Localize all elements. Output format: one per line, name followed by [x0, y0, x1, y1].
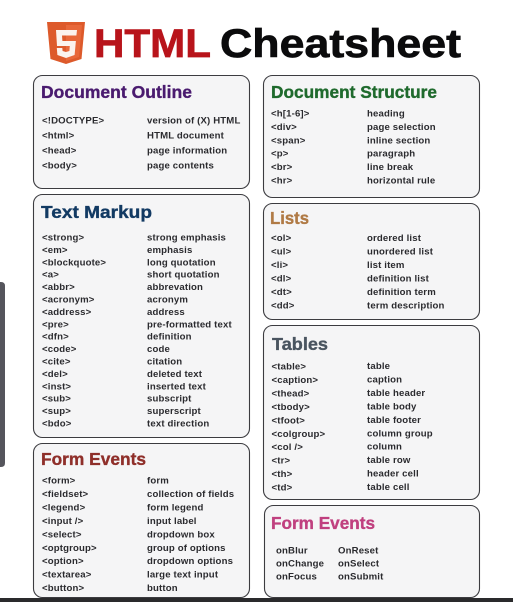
- descriptions: table cell: [367, 482, 410, 493]
- descriptions: strong emphasis: [147, 232, 226, 244]
- descriptions: header cell: [367, 469, 419, 480]
- descriptions: citation: [147, 356, 182, 368]
- descriptions: page information: [147, 146, 227, 156]
- tags: <html>: [42, 130, 75, 142]
- tags: <div>: [271, 122, 297, 133]
- tags: <cite>: [42, 356, 71, 368]
- descriptions: column group: [367, 428, 433, 439]
- panel: document structure: [264, 76, 480, 198]
- tags: <bdo>: [42, 418, 72, 430]
- tags: <sup>: [42, 406, 71, 417]
- descriptions: table: [367, 361, 390, 372]
- descriptions: definition list: [367, 274, 430, 284]
- tags: <head>: [42, 146, 77, 156]
- heading: form events: Form Events: [271, 513, 375, 533]
- tags: <hr>: [271, 176, 293, 186]
- tags: <thead>: [272, 388, 310, 399]
- descriptions: dropdown options: [147, 556, 233, 567]
- descriptions: deleted text: [147, 369, 203, 380]
- descriptions: term description: [367, 300, 445, 312]
- descriptions: acronym: [147, 294, 188, 306]
- descriptions: button: [147, 583, 178, 594]
- descriptions: version of (X) HTML: [147, 116, 240, 126]
- descriptions: [147, 476, 234, 594]
- heading: document structure: Document Structure: [271, 82, 437, 102]
- tags: <dl>: [271, 274, 292, 284]
- descriptions: table row: [367, 455, 411, 466]
- descriptions: large text input: [147, 570, 219, 581]
- descriptions: code: [147, 344, 170, 355]
- descriptions: pre-formatted text: [147, 319, 232, 330]
- side tab: [0, 282, 5, 467]
- descriptions: collection of fields: [147, 489, 234, 500]
- tags: <col />: [272, 442, 303, 453]
- descriptions: page contents: [147, 160, 214, 172]
- heading: form events: Form Events: [41, 449, 146, 469]
- tags: <input />: [42, 516, 84, 527]
- panel: tables: [264, 326, 480, 500]
- descriptions: list item: [367, 260, 405, 271]
- title: HTML: [94, 22, 211, 66]
- tags: <form>: [42, 476, 76, 486]
- tags: <pre>: [42, 319, 69, 330]
- tags: <p>: [271, 149, 289, 160]
- descriptions: table header: [367, 388, 425, 399]
- panel: text markup: [34, 194, 250, 438]
- icon: HTML5 shield: [47, 22, 85, 64]
- tags: <address>: [42, 307, 92, 318]
- descriptions: form: [147, 476, 169, 486]
- bottom dark band: [0, 598, 513, 602]
- tags: <ol>: [271, 233, 292, 244]
- descriptions: subscript: [147, 394, 192, 405]
- tags: [42, 116, 105, 172]
- heading: lists: Lists: [270, 208, 309, 228]
- heading: text markup: Text Markup: [41, 202, 152, 222]
- left events: onBlur: [276, 546, 308, 556]
- left events: onFocus: [276, 572, 317, 582]
- heading: document outline: Document Outline: [41, 82, 192, 102]
- tags: <del>: [42, 369, 68, 380]
- tags: [271, 233, 295, 312]
- tags: <caption>: [272, 375, 318, 386]
- tags: <body>: [42, 160, 77, 172]
- descriptions: HTML document: [147, 130, 225, 142]
- tags: <li>: [271, 260, 288, 271]
- tags: <code>: [42, 344, 77, 355]
- descriptions: abbrevation: [147, 282, 203, 293]
- tags: <h[1-6]>: [271, 108, 310, 120]
- tags: <select>: [42, 529, 82, 540]
- tags: <span>: [271, 135, 306, 146]
- panel: form events (tags): [34, 444, 250, 598]
- tags: <dt>: [271, 287, 292, 298]
- tags: [42, 232, 106, 430]
- descriptions: group of options: [147, 543, 226, 554]
- panel: form events (handlers): [264, 506, 480, 598]
- descriptions: unordered list: [367, 246, 434, 258]
- right events: [338, 546, 384, 582]
- descriptions: form legend: [147, 502, 204, 513]
- descriptions: page selection: [367, 122, 436, 133]
- descriptions: inline section: [367, 135, 430, 146]
- descriptions: paragraph: [367, 149, 415, 160]
- panel: lists: [264, 204, 480, 320]
- tags: <table>: [272, 362, 306, 372]
- descriptions: short quotation: [147, 270, 220, 281]
- tags: <ul>: [271, 246, 292, 258]
- descriptions: [147, 232, 232, 430]
- right events: OnReset: [338, 546, 379, 556]
- tags: <legend>: [42, 502, 86, 513]
- tags: [42, 476, 97, 594]
- tags: <tr>: [272, 456, 290, 467]
- tags: <em>: [42, 245, 68, 256]
- descriptions: [367, 361, 433, 493]
- descriptions: address: [147, 307, 185, 318]
- descriptions: input label: [147, 516, 197, 527]
- tags: [271, 108, 310, 186]
- tags: <td>: [272, 482, 293, 494]
- tags: <inst>: [42, 381, 71, 392]
- tags: <colgroup>: [272, 429, 325, 440]
- tags: <th>: [272, 469, 293, 480]
- descriptions: [367, 233, 445, 312]
- tags: <dd>: [271, 300, 295, 312]
- descriptions: long quotation: [147, 257, 216, 268]
- descriptions: emphasis: [147, 245, 192, 256]
- descriptions: caption: [367, 374, 402, 386]
- descriptions: horizontal rule: [367, 176, 435, 186]
- descriptions: definition: [147, 332, 192, 343]
- descriptions: ordered list: [367, 233, 422, 244]
- tags: <tbody>: [272, 402, 310, 413]
- heading: tables: Tables: [272, 334, 328, 354]
- descriptions: table body: [367, 401, 417, 412]
- tags: <optgroup>: [42, 543, 97, 554]
- descriptions: table footer: [367, 415, 421, 426]
- tags: <sub>: [42, 394, 71, 405]
- descriptions: [147, 116, 240, 172]
- tags: <abbr>: [42, 282, 75, 293]
- tags: <button>: [42, 583, 84, 594]
- title: Cheatsheet: [220, 22, 461, 66]
- tags: <acronym>: [42, 294, 95, 306]
- tags: <option>: [42, 556, 84, 567]
- tags: <fieldset>: [42, 489, 89, 500]
- tags: <blockquote>: [42, 257, 106, 268]
- right events: onSelect: [338, 558, 380, 570]
- right events: onSubmit: [338, 572, 384, 582]
- tags: <textarea>: [42, 570, 92, 581]
- tags: <strong>: [42, 232, 84, 244]
- descriptions: inserted text: [147, 381, 207, 392]
- tags: <br>: [271, 162, 293, 173]
- descriptions: line break: [367, 162, 414, 173]
- left events: [276, 546, 324, 582]
- tags: <dfn>: [42, 332, 69, 343]
- descriptions: [367, 108, 436, 186]
- tags: <a>: [42, 270, 59, 281]
- descriptions: definition term: [367, 287, 436, 298]
- tags: <tfoot>: [272, 415, 305, 426]
- panel: document outline: [34, 76, 250, 188]
- descriptions: heading: [367, 108, 405, 120]
- descriptions: superscript: [147, 406, 202, 417]
- descriptions: text direction: [147, 418, 209, 430]
- descriptions: column: [367, 442, 402, 453]
- descriptions: dropdown box: [147, 529, 215, 540]
- tags: [272, 362, 325, 494]
- left events: onChange: [276, 558, 324, 570]
- tags: <!DOCTYPE>: [42, 116, 105, 126]
- title: [94, 22, 461, 66]
